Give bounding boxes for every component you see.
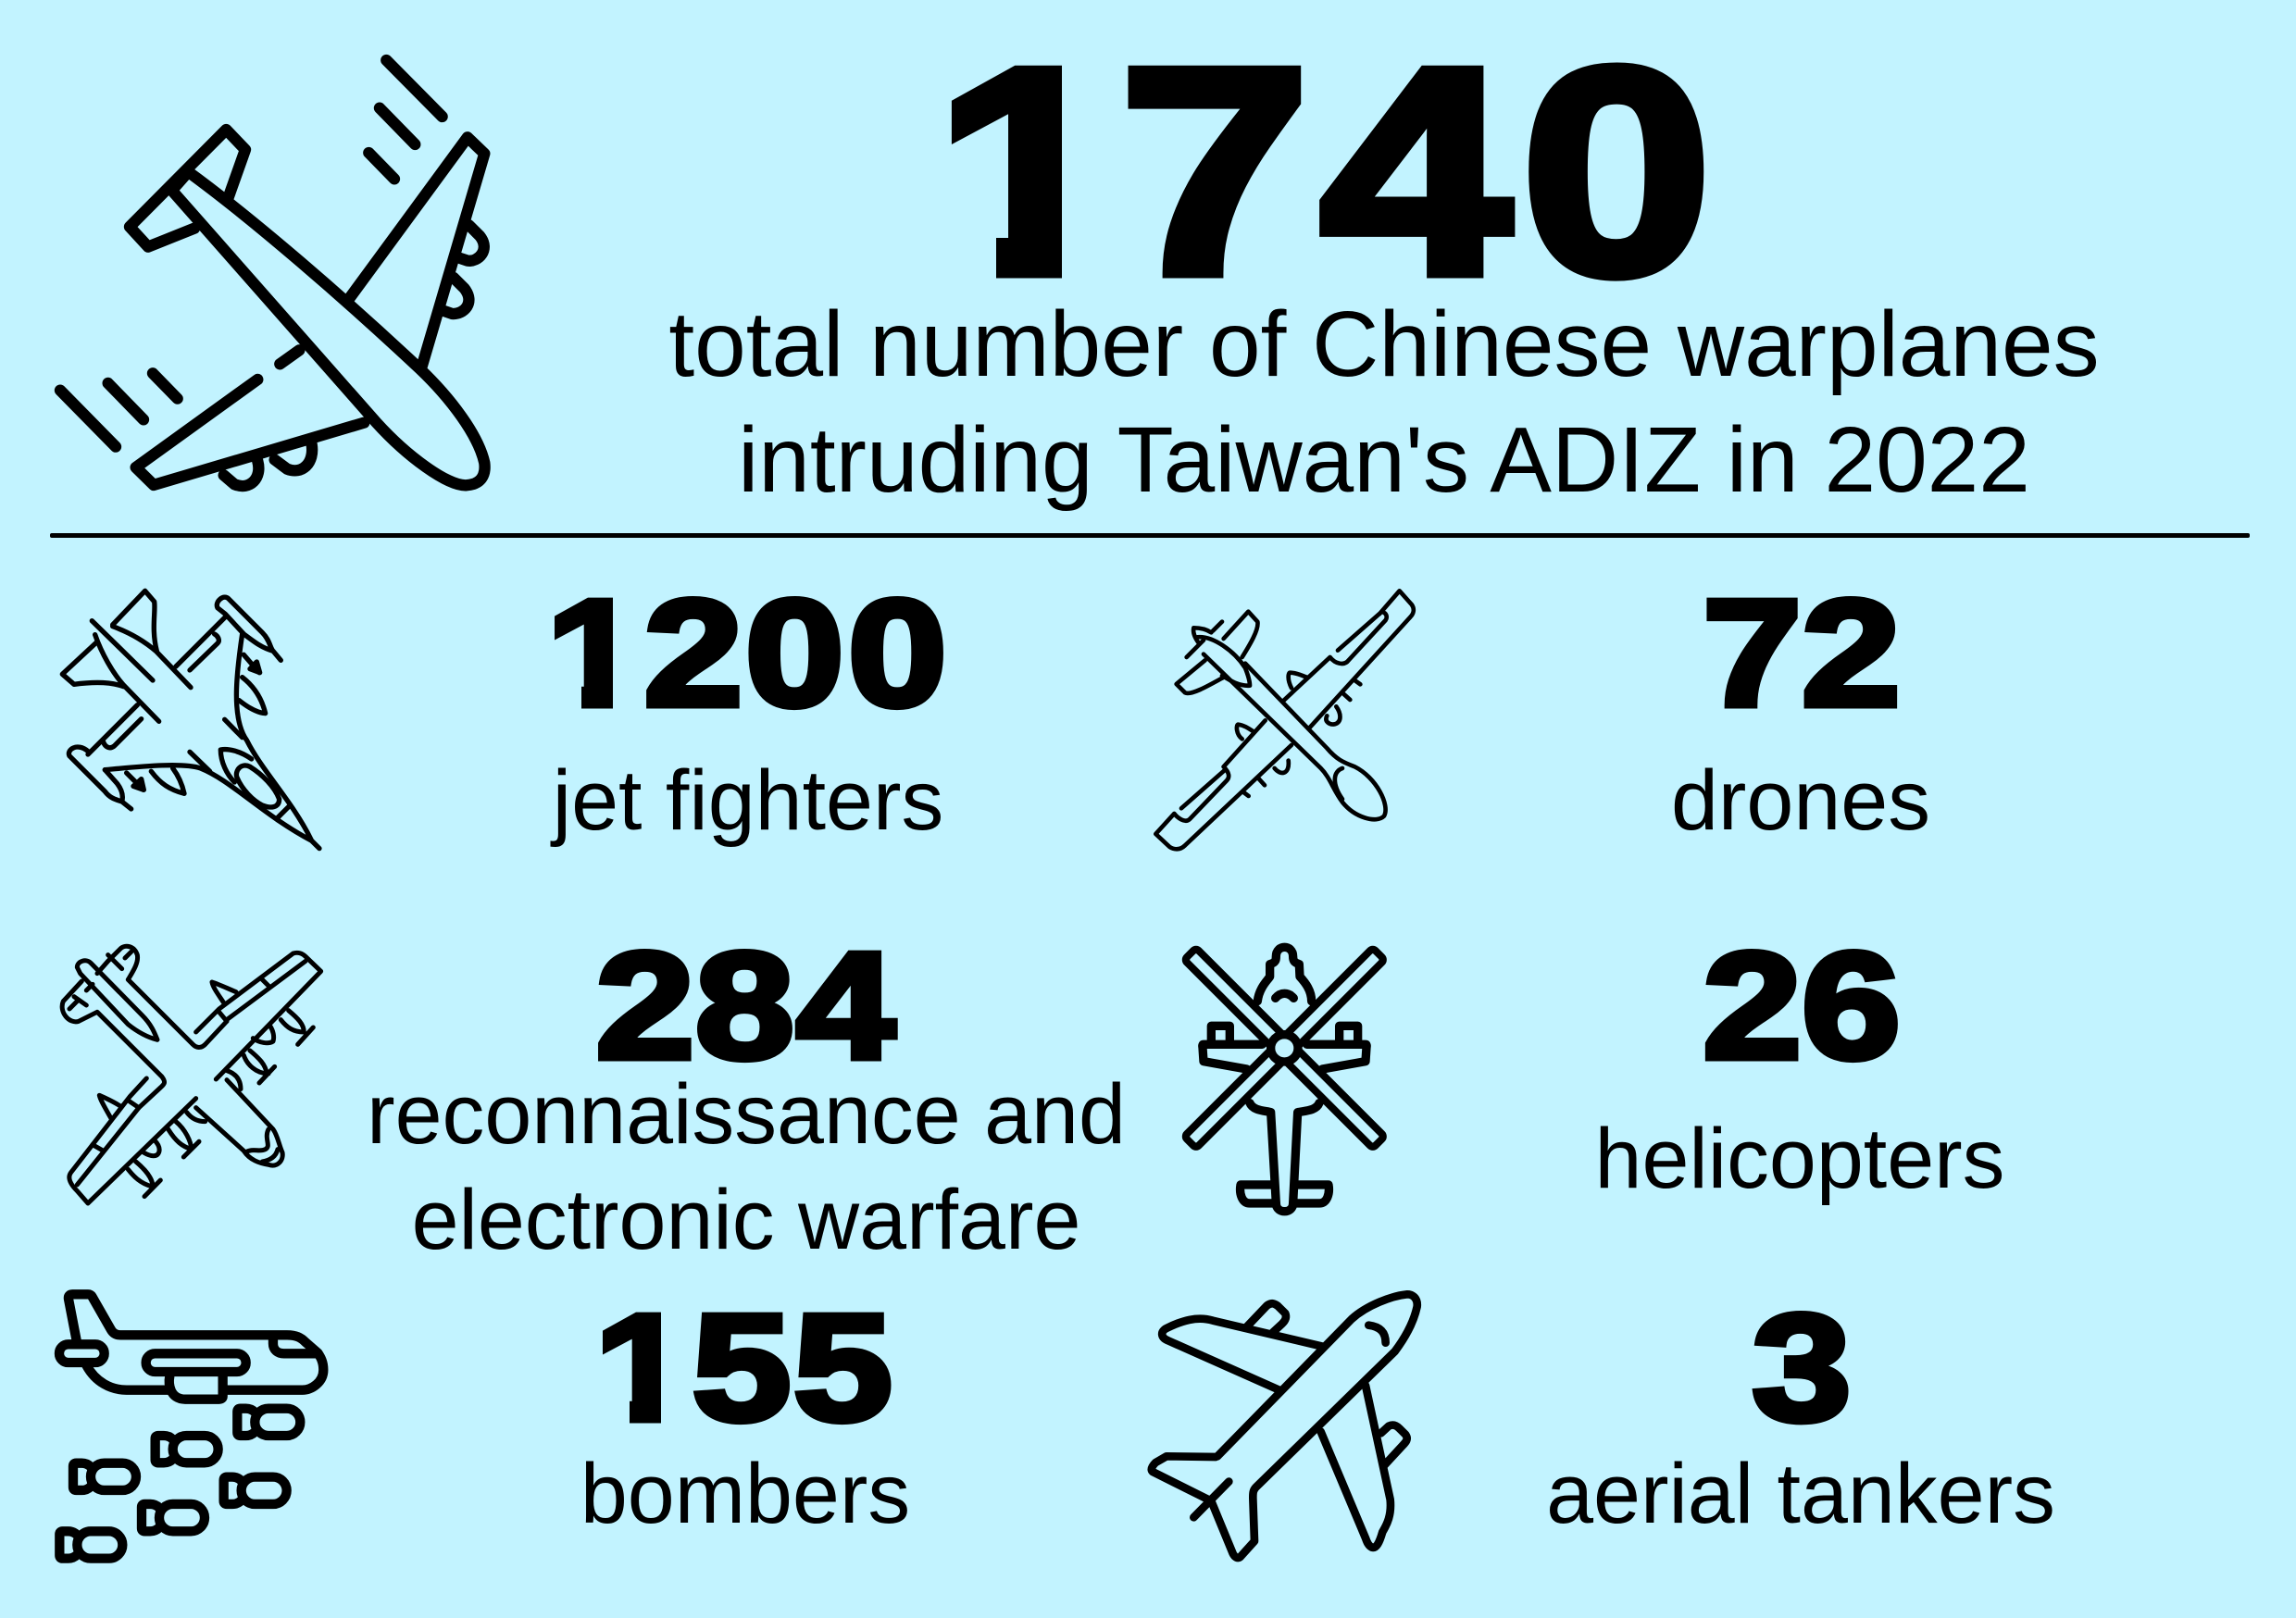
stat: aerial tankers — [1546, 1282, 2055, 1541]
heading: description of total: intruding Taiwan's ADIZ in 2022 — [738, 408, 2030, 512]
stat: reconnaissance and electronic warfare — [367, 920, 1126, 1267]
icon: aerial tanker — [1152, 1294, 1417, 1558]
stat: aerial tankers: aerial tankers — [1546, 1447, 2055, 1541]
icon: drone — [1155, 591, 1414, 849]
heading: description of total — [668, 292, 2100, 512]
icon: jet fighter — [62, 591, 319, 849]
stat: helicopters: helicopters — [1595, 1112, 2004, 1206]
stat: jet fighters: 1200 — [546, 567, 947, 738]
stat: bombers: 155 — [594, 1282, 892, 1452]
icon: bomber with falling bombs — [59, 1294, 323, 1559]
stat: jet fighters — [537, 567, 947, 848]
heading: description of total: total number of Chinese warplanes — [668, 292, 2100, 396]
stat: reconnaissance and electronic warfare: 284 — [596, 920, 895, 1090]
stat: drones — [1671, 567, 1930, 848]
stat: aerial tankers: 3 — [1753, 1282, 1851, 1452]
icon: helicopter — [1185, 947, 1384, 1212]
stat: bombers: bombers — [580, 1447, 910, 1541]
stat: reconnaissance and electronic warfare: reconnaissance and — [367, 1067, 1126, 1162]
stat: jet fighters: jet fighters — [550, 753, 943, 848]
stat: drones: 72 — [1703, 567, 1901, 738]
stat: bombers — [580, 1282, 910, 1541]
stat: helicopters — [1595, 920, 2004, 1206]
title: total number: 1740 — [934, 7, 1712, 336]
stat: reconnaissance and electronic warfare: electronic warfare — [412, 1173, 1080, 1267]
stat: drones: drones — [1671, 753, 1930, 848]
icon: reconnaissance aircraft — [62, 946, 321, 1203]
stat: helicopters: 26 — [1703, 920, 1901, 1090]
icon: large airplane with speed lines — [60, 60, 485, 486]
